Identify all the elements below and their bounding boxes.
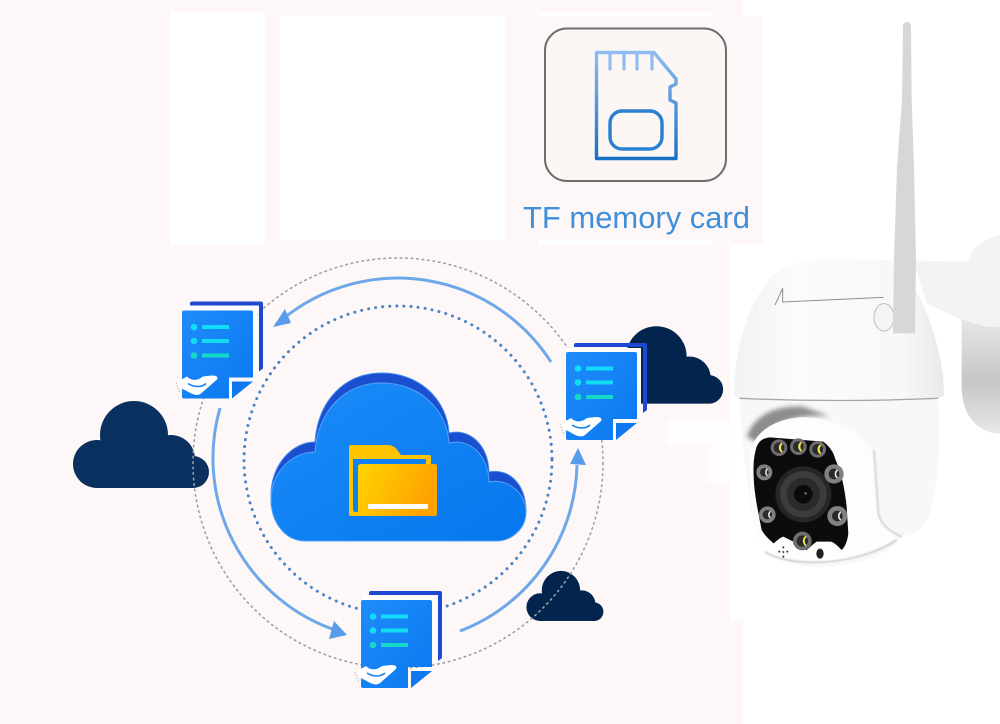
shaded housing edge bbox=[874, 450, 902, 537]
cloud back layer bbox=[271, 373, 526, 512]
camera face bbox=[753, 437, 848, 550]
icon: memory card bbox=[596, 52, 676, 158]
document icon bottom bbox=[355, 591, 442, 688]
arrow: top arc bbox=[284, 278, 551, 362]
white light LEDs bbox=[771, 438, 826, 550]
dome bbox=[734, 259, 944, 400]
arrow: right arc bbox=[460, 465, 577, 631]
antenna bbox=[893, 22, 916, 333]
arrowheads bbox=[273, 309, 586, 639]
outer dotted ring bbox=[193, 258, 603, 668]
central cloud with folder bbox=[271, 373, 526, 541]
small cloud right bbox=[602, 326, 723, 404]
antenna socket bbox=[874, 304, 894, 331]
arrow: left arc bbox=[213, 408, 335, 630]
ball lower shading bbox=[765, 540, 897, 562]
document icon right bbox=[560, 343, 647, 440]
wall bracket bbox=[913, 235, 1000, 433]
small cloud left bbox=[73, 401, 209, 488]
heading: TF memory card: TF memory card bbox=[523, 200, 750, 235]
cloud front layer bbox=[271, 383, 526, 541]
small cloud bottom right bbox=[526, 571, 603, 621]
security camera photo bbox=[734, 22, 1000, 567]
icon frame bbox=[545, 28, 726, 181]
inner dotted ring bbox=[244, 306, 552, 614]
hood shadow bbox=[747, 407, 830, 443]
inner housing bbox=[749, 417, 897, 564]
circular arrows bbox=[213, 278, 586, 639]
infrared LEDs bbox=[756, 464, 847, 526]
lens bbox=[775, 466, 831, 522]
dome seam bbox=[775, 288, 883, 305]
panel: TF memory card bbox=[523, 28, 750, 235]
microphone bbox=[816, 549, 824, 559]
icon: folder bbox=[349, 445, 437, 516]
camera ball bbox=[739, 397, 939, 567]
dome base line bbox=[739, 398, 938, 400]
speaker holes bbox=[778, 546, 788, 558]
document icon top left bbox=[176, 302, 263, 398]
